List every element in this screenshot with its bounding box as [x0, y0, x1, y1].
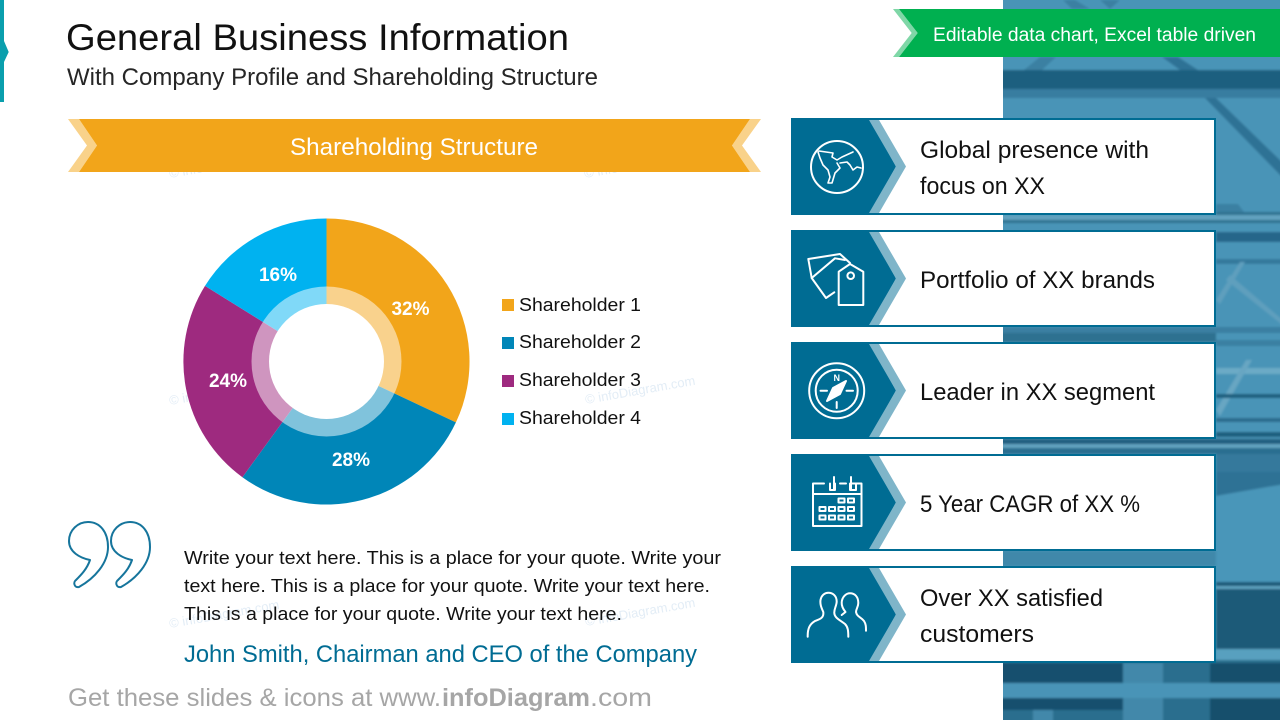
ribbon: Shareholding Structure: Shareholding Structure [290, 134, 538, 161]
left accent bar [0, 0, 9, 102]
slice: Shareholder 3 [183, 286, 326, 477]
icon: people [808, 593, 866, 637]
card: customers: Over XX satisfied [920, 585, 1103, 612]
card: leader [791, 342, 1215, 439]
legend item 1: Shareholder 1 [519, 295, 641, 315]
icon: price tags [808, 254, 863, 305]
watermarks: © infoDiagram.com [584, 595, 696, 629]
card: global presence [791, 118, 1215, 215]
legend [502, 295, 641, 428]
watermarks: © infoDiagram.com [583, 147, 695, 181]
card: global presence: focus on XX [920, 173, 1045, 200]
icon: globe [811, 141, 863, 193]
inner translucent ring [252, 286, 402, 436]
label 16%: 16% [259, 265, 297, 286]
slice: Shareholder 1 [326, 218, 470, 422]
legend item 3: Shareholder 3 [519, 370, 641, 390]
slice: Shareholder 2 [242, 362, 456, 505]
icon: quote marks [69, 522, 150, 587]
quote text: Write your text here. This is a place for your quote. Write your [184, 548, 721, 568]
icon: compass [809, 363, 864, 418]
card: portfolio [791, 230, 1215, 327]
slice: Shareholder 4 [205, 218, 326, 362]
card: CAGR [791, 454, 1215, 551]
subtitle: With Company Profile and Shareholding Structure [67, 64, 598, 91]
label 32%: 32% [391, 299, 430, 320]
watermarks [168, 147, 696, 631]
card: global presence: Global presence with [920, 137, 1149, 164]
ribbon: Shareholding Structure [68, 119, 761, 172]
label 28%: 28% [332, 450, 370, 471]
donut hole [269, 304, 384, 419]
donut chart [183, 218, 470, 505]
quote text [184, 548, 721, 624]
label 24%: 24% [209, 371, 247, 392]
quote text: This is a place for your quote. Write your text here. [184, 604, 622, 624]
quote author: John Smith, Chairman and CEO of the Company [184, 641, 697, 668]
card: leader: Leader in XX segment [920, 379, 1155, 406]
footer link [68, 684, 652, 712]
footer link: .com [590, 684, 652, 712]
background photo panel [995, 0, 1280, 720]
watermarks: © infoDiagram.com [168, 147, 280, 181]
watermarks: © infoDiagram.com [168, 597, 280, 631]
footer link: infoDiagram [442, 684, 590, 712]
card: customers [791, 566, 1215, 663]
quote text: text here. This is a place for your quote. Write your text here. [184, 576, 710, 596]
legend item 2: Shareholder 2 [519, 332, 641, 352]
title: General Business Information [66, 17, 569, 58]
footer link: Get these slides & icons at www. [68, 684, 441, 712]
icon: compass: N [833, 373, 840, 383]
card: portfolio: Portfolio of XX brands [920, 267, 1155, 294]
card: customers: customers [920, 621, 1034, 648]
watermarks: © infoDiagram.com [584, 373, 696, 407]
green banner [893, 9, 1280, 57]
icon: calendar [813, 477, 862, 526]
green banner: Editable data chart, Excel table driven [933, 25, 1256, 46]
card: CAGR: 5 Year CAGR of XX % [920, 491, 1140, 518]
legend item 4: Shareholder 4 [519, 408, 641, 428]
watermarks: © infoDiagram.com [168, 374, 280, 408]
